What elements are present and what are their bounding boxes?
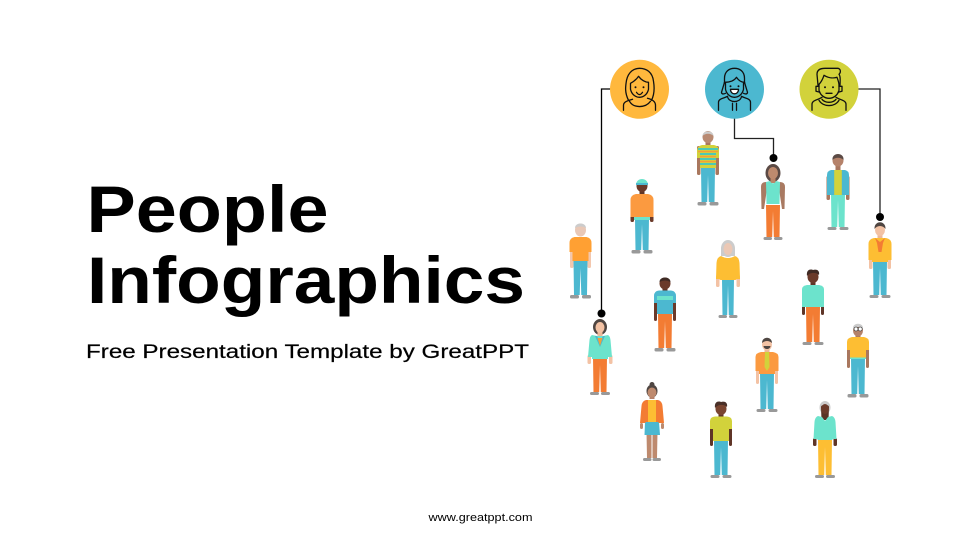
person: bearded man orange shirt, lime tie [756, 338, 778, 412]
person: woman orange jacket, blue skirt [640, 382, 664, 461]
person: woman teal top, orange pants (blue link) [761, 164, 785, 240]
person: grey-haired man with glasses, yellow shirt [847, 324, 869, 398]
person: woman teal jacket, orange pants (orange link) [588, 319, 612, 395]
person: man blue shirt, orange pants [654, 278, 676, 352]
person: man blue jacket, yellow shirt [826, 154, 850, 230]
person: grey-haired man orange shirt [570, 224, 592, 298]
title [86, 172, 525, 317]
connector: orange avatar to woman [598, 89, 611, 318]
subtitle: Free Presentation Template by GreatPPT [86, 342, 529, 363]
avatar: woman on orange circle [610, 60, 669, 119]
avatar: man on lime circle [800, 60, 858, 119]
person: grey-haired woman teal top, yellow pants [813, 401, 837, 478]
title: People [86, 172, 328, 246]
connector: blue avatar to woman [734, 118, 778, 162]
person: man teal shirt, orange pants [802, 270, 824, 345]
person: man teal cap, orange sweater [630, 179, 654, 254]
person: grey-haired woman yellow top [716, 240, 740, 318]
title: Infographics [87, 243, 525, 317]
footer url: www.greatppt.com [427, 512, 532, 524]
person: striped shirt man [697, 131, 719, 206]
avatar: woman on blue circle [705, 60, 764, 119]
person: man lime shirt, blue pants [710, 402, 732, 478]
connector: lime avatar to man [858, 89, 884, 221]
person: man yellow shirt, orange scarf (lime link) [868, 222, 892, 298]
